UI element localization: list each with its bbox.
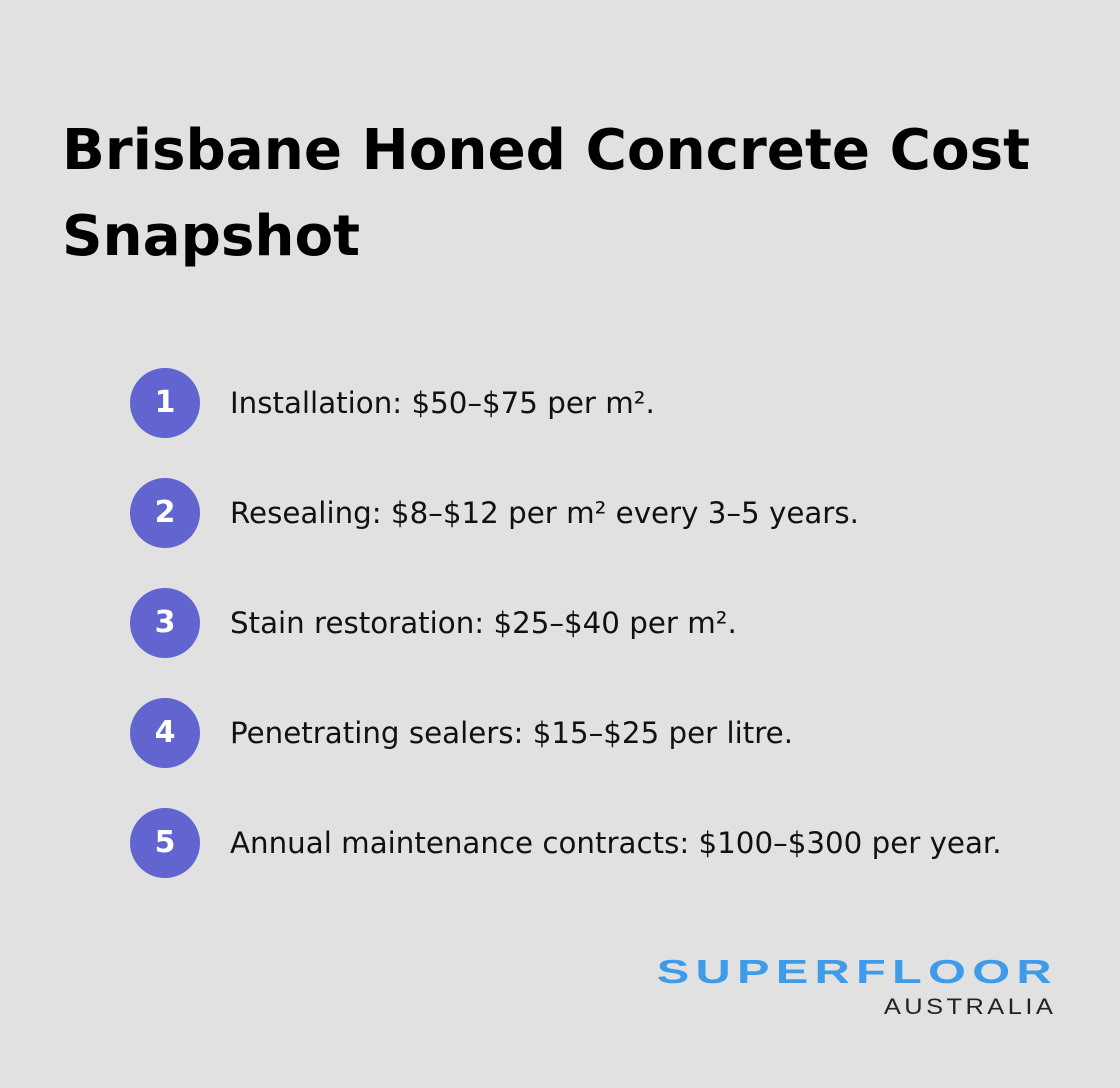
- title: Brisbane Honed Concrete Cost Snapshot: [62, 118, 1030, 269]
- list item 5: 5: [155, 825, 175, 860]
- logo: SUPERFLOOR: [657, 954, 1058, 991]
- list item 2: Resealing: $8–$12 per m² every 3–5 years.: [230, 496, 859, 530]
- list item 3: Stain restoration: $25–$40 per m².: [230, 606, 737, 640]
- list item 4: 4: [155, 715, 175, 750]
- logo: [657, 954, 1058, 1019]
- list item 2: 2: [155, 495, 175, 530]
- list item 4: [130, 698, 793, 768]
- list item 3: 3: [155, 605, 175, 640]
- logo: AUSTRALIA: [884, 994, 1056, 1019]
- list item 1: [130, 368, 655, 438]
- list item 4: Penetrating sealers: $15–$25 per litre.: [230, 716, 793, 750]
- list item 3: [130, 588, 737, 658]
- list item 5: [130, 808, 1002, 878]
- list item 5: Annual maintenance contracts: $100–$300 per year.: [230, 826, 1002, 860]
- list item 2: [130, 478, 859, 548]
- list item 1: 1: [155, 385, 175, 420]
- list item 1: Installation: $50–$75 per m².: [230, 386, 655, 420]
